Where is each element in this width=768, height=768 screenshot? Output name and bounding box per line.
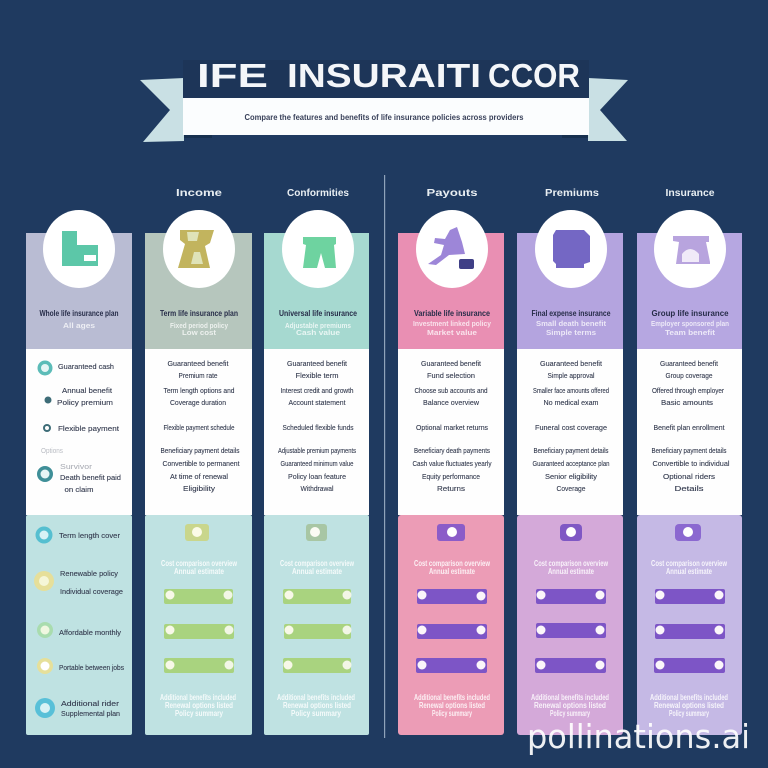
- column 4 feature text: Choose sub accounts and: [414, 386, 488, 395]
- column 4 footer text: Renewal options listed: [419, 701, 485, 710]
- column 4 bars: Cost comparison overview: [414, 559, 491, 568]
- column 6 footer text: Policy summary: [669, 709, 709, 718]
- column 5 heading text: [532, 309, 611, 337]
- column 2 bars: Annual estimate: [174, 567, 224, 576]
- column 3 heading text: Cash value: [296, 330, 340, 337]
- column 2 feature text: Flexible payment schedule: [164, 423, 234, 432]
- column 6 heading text: [651, 309, 729, 337]
- column 6 feature text: Basic amounts: [661, 398, 713, 407]
- panel: column 2: [145, 210, 252, 735]
- column 1 feature list: [37, 360, 121, 494]
- column 4 heading text: Market value: [427, 330, 477, 337]
- column 6 feature text: Beneficiary payment details: [652, 446, 727, 455]
- column 6 feature text: Benefit plan enrollment: [654, 423, 725, 432]
- column 5 bars: Cost comparison overview: [534, 559, 609, 568]
- column 6 feature text: Guaranteed benefit: [660, 359, 719, 368]
- icon detail: arch: [682, 249, 699, 262]
- column 1 feature list: Guaranteed cash: [58, 362, 114, 371]
- column 6 feature text: Details: [674, 484, 704, 493]
- column 6 feature text: Optional riders: [663, 472, 715, 481]
- column 2 feature text: Beneficiary payment details: [160, 446, 240, 455]
- column 1 lower list: Additional rider: [61, 699, 120, 708]
- column 2 badge: [185, 524, 209, 541]
- column 3 footer text: Policy summary: [291, 709, 341, 718]
- title: INSURAITI: [287, 57, 481, 94]
- column 5 feature text: Senior eligibility: [545, 472, 597, 481]
- column 6 footer text: [650, 693, 728, 718]
- column 5 feature text: [532, 359, 610, 493]
- column 2 feature text: At time of renewal: [170, 472, 228, 481]
- column 2 footer text: Policy summary: [175, 709, 223, 718]
- column 5 footer text: Renewal options listed: [534, 701, 606, 710]
- column 2 feature text: Coverage duration: [170, 398, 226, 407]
- column 4 heading text: Investment linked policy: [413, 321, 491, 328]
- column 1 lower list: Renewable policy: [60, 569, 118, 578]
- column 3 heading text: Universal life insurance: [279, 309, 357, 318]
- title banner: [140, 57, 628, 142]
- column 4 feature text: Beneficiary death payments: [414, 446, 490, 455]
- column 1 feature list: Options: [41, 446, 63, 455]
- column 6 feature text: Offered through employer: [652, 386, 724, 395]
- column 4 feature text: Cash value fluctuates yearly: [412, 459, 492, 468]
- column 1 feature list: Death benefit paid: [60, 473, 121, 482]
- column 2 heading text: Low cost: [182, 330, 217, 337]
- column 2 feature text: Eligibility: [183, 484, 215, 493]
- panel: column 3: [264, 210, 369, 735]
- icon: building: [62, 231, 98, 266]
- column 2 feature text: Guaranteed benefit: [168, 359, 229, 368]
- column 2 heading text: [160, 309, 238, 337]
- column 1 feature list: on claim: [64, 485, 94, 494]
- column 5 footer text: Additional benefits included: [531, 693, 609, 702]
- column headings: Income: [176, 188, 223, 199]
- column 3 feature text: [278, 359, 356, 493]
- column 3 feature text: Guaranteed benefit: [287, 359, 348, 368]
- column 2 feature text: Term length options and: [164, 386, 234, 395]
- column 1 heading text: [40, 309, 119, 330]
- column 4 bars: [414, 559, 491, 673]
- icon: purple figure: [428, 227, 465, 265]
- column 2 feature text: Premium rate: [178, 371, 218, 380]
- column 4 badge: [437, 524, 465, 541]
- column 4 feature text: Returns: [437, 484, 465, 493]
- column 5 feature text: Funeral cost coverage: [535, 423, 607, 432]
- icon: green building: [303, 237, 336, 268]
- column 3 bars: Annual estimate: [292, 567, 342, 576]
- column 5 footer text: Policy summary: [550, 709, 590, 718]
- panel: column 5: [517, 210, 623, 735]
- column 3 feature text: Flexible term: [296, 371, 338, 380]
- column 4 feature text: Equity performance: [422, 472, 480, 481]
- icon: purple building: [553, 230, 590, 268]
- column 3 feature text: Adjustable premium payments: [278, 446, 356, 455]
- column 4 feature text: Optional market returns: [416, 423, 488, 432]
- column 5 badge: [560, 524, 582, 541]
- column 4 heading text: [413, 309, 491, 337]
- column 6 heading text: Team benefit: [665, 330, 716, 337]
- subtitle: Compare the features and benefits of life insurance policies across providers: [244, 113, 524, 122]
- column 2 bars: Cost comparison overview: [161, 559, 238, 568]
- column headings: Payouts: [426, 188, 478, 199]
- column headings: Premiums: [545, 188, 599, 199]
- column headings: Insurance: [666, 188, 715, 199]
- column 1 lower list: Term length cover: [59, 531, 121, 540]
- column 5 feature text: No medical exam: [544, 398, 598, 407]
- column 6 feature text: Convertible to individual: [652, 459, 730, 468]
- column 4 footer text: Policy summary: [432, 709, 472, 718]
- column 2 heading text: Fixed period policy: [170, 323, 228, 330]
- column 2 footer text: Renewal options listed: [165, 701, 233, 710]
- column 1 lower list: Individual coverage: [60, 587, 123, 596]
- column 6 bars: Cost comparison overview: [651, 559, 728, 568]
- column 5 feature text: Simple approval: [548, 371, 595, 380]
- column 5 heading text: Small death benefit: [536, 321, 607, 328]
- column 5 heading text: Final expense insurance: [532, 309, 611, 318]
- column 3 footer text: [277, 693, 355, 718]
- icon: lilac building: [673, 236, 710, 264]
- column 6 footer text: Renewal options listed: [654, 701, 724, 710]
- column 3 feature text: Interest credit and growth: [280, 386, 354, 395]
- column 6 heading text: Group life insurance: [652, 309, 729, 318]
- column 3 feature text: Withdrawal: [300, 484, 334, 493]
- column 2 heading text: Term life insurance plan: [160, 309, 238, 318]
- column 1 lower list: [34, 526, 124, 718]
- panel: column 6: [637, 210, 742, 735]
- column 5 feature text: Coverage: [556, 484, 586, 493]
- column 5 feature text: Guaranteed acceptance plan: [532, 459, 610, 468]
- column 5 heading text: Simple terms: [546, 330, 596, 337]
- column 6 badge: [675, 524, 701, 541]
- column 5 bars: Annual estimate: [548, 567, 594, 576]
- column 2 feature text: Convertible to permanent: [162, 459, 240, 468]
- column 6 heading text: Employer sponsored plan: [651, 321, 729, 328]
- column 3 footer text: Renewal options listed: [283, 701, 351, 710]
- column headings: Conformities: [287, 188, 349, 199]
- column 4 feature text: Guaranteed benefit: [421, 359, 482, 368]
- column 1 heading text: Whole life insurance plan: [40, 309, 119, 318]
- column 1 feature list: Flexible payment: [58, 424, 120, 433]
- column 1 feature list: Annual benefit: [62, 386, 113, 395]
- column 5 bars: [534, 559, 609, 673]
- column 5 footer text: [531, 693, 609, 718]
- icon: small case: [459, 259, 474, 269]
- column 6 bars: Annual estimate: [666, 567, 712, 576]
- column 5 feature text: Beneficiary payment details: [534, 446, 609, 455]
- column 2 feature text: [160, 359, 240, 493]
- panel: column 4: [398, 210, 504, 735]
- column 4 footer text: [414, 693, 490, 718]
- column 1 lower list: Portable between jobs: [59, 663, 124, 672]
- column 6 footer text: Additional benefits included: [650, 693, 728, 702]
- column 1 lower list: Affordable monthly: [59, 628, 121, 637]
- column 4 feature text: Fund selection: [427, 371, 475, 380]
- column headings: [176, 188, 715, 199]
- title: IFE: [197, 57, 268, 94]
- column 3 feature text: Policy loan feature: [288, 472, 346, 481]
- column 3 badge: [306, 524, 327, 541]
- column 1 heading text: All ages: [63, 323, 95, 330]
- column 3 heading text: Adjustable premiums: [285, 323, 351, 330]
- column 3 feature text: Scheduled flexible funds: [282, 423, 354, 432]
- title: CCOR: [488, 57, 580, 94]
- column 2 footer text: Additional benefits included: [160, 693, 236, 702]
- icon: gold building: [178, 230, 214, 268]
- column 6 feature text: Group coverage: [666, 371, 712, 380]
- column 2 footer text: [160, 693, 236, 718]
- title: [197, 57, 580, 94]
- column 1 lower list: Supplemental plan: [61, 709, 120, 718]
- column 4 feature text: [412, 359, 492, 493]
- column 3 feature text: Guaranteed minimum value: [280, 459, 354, 468]
- center divider: [384, 175, 385, 738]
- column 4 feature text: Balance overview: [423, 398, 480, 407]
- column 5 feature text: Smaller face amounts offered: [533, 386, 609, 395]
- column 3 heading text: [279, 309, 357, 337]
- column 5 feature text: Guaranteed benefit: [540, 359, 603, 368]
- column 6 feature text: [652, 359, 730, 493]
- panel: column 1: [26, 210, 132, 735]
- column 4 bars: Annual estimate: [429, 567, 475, 576]
- column 3 bars: [280, 559, 355, 673]
- column 6 bars: [651, 559, 728, 673]
- column 3 feature text: Account statement: [288, 398, 346, 407]
- column 1 feature list: Policy premium: [57, 398, 113, 407]
- column 1 feature list: Survivor: [60, 462, 93, 471]
- watermark: pollinations.ai: [527, 717, 750, 756]
- column 2 bars: [161, 559, 238, 673]
- column 4 heading text: Variable life insurance: [414, 309, 490, 318]
- column 4 footer text: Additional benefits included: [414, 693, 490, 702]
- column 3 bars: Cost comparison overview: [280, 559, 355, 568]
- column 3 footer text: Additional benefits included: [277, 693, 355, 702]
